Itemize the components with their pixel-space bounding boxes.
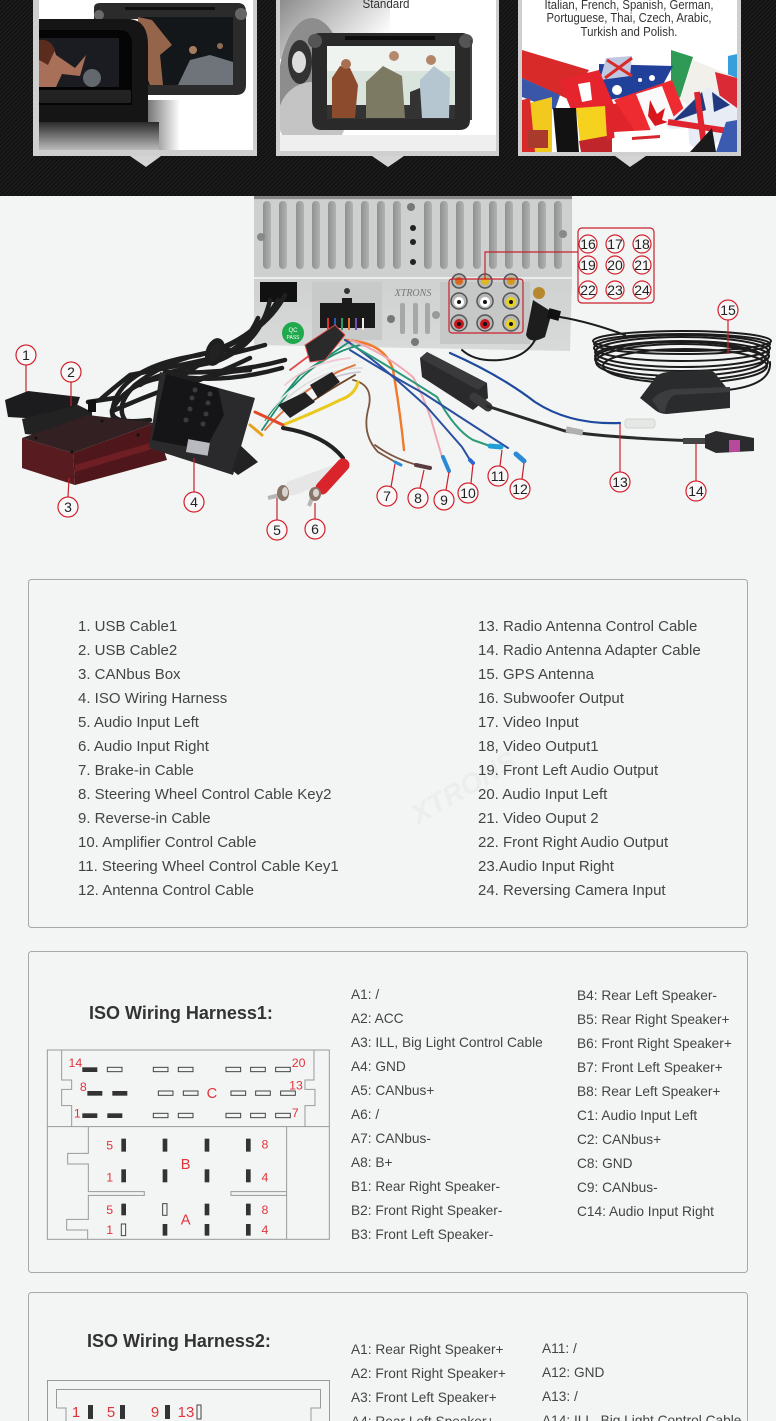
- USB plugs: [5, 391, 96, 435]
- wiring photo: [5, 196, 771, 540]
- panel: cable legend: [28, 580, 748, 928]
- pin list: column 1: A2: Front Right Speaker+: [351, 1366, 506, 1381]
- card: headrest monitors: [33, 0, 257, 167]
- connector diagram: 5: [107, 1404, 115, 1421]
- callout numbers: 19: [580, 257, 596, 273]
- pin list: column 2: A13: /: [542, 1389, 578, 1404]
- callout numbers: 20: [607, 257, 623, 273]
- dark feature band: [0, 0, 776, 196]
- callout numbers: [16, 235, 738, 540]
- pin list: column A: A4: GND: [351, 1059, 406, 1074]
- connector diagram: A: [181, 1212, 191, 1228]
- pin list: column B: C9: CANbus-: [577, 1180, 658, 1195]
- connector diagram: 8: [80, 1080, 87, 1094]
- callout numbers: 14: [688, 483, 704, 499]
- legend: left column: 10. Amplifier Control Cable: [78, 834, 256, 851]
- RCA audio plugs: [268, 465, 343, 506]
- watermark: XTRONS: [404, 745, 522, 831]
- pin list: column 1: [351, 1342, 506, 1421]
- pin list: column B: B7: Front Left Speaker+: [577, 1060, 723, 1075]
- legend: left column: 7. Brake-in Cable: [78, 762, 194, 779]
- legend: left column: 2. USB Cable2: [78, 642, 177, 659]
- callout numbers: 1: [22, 347, 30, 363]
- connector diagram: 5: [106, 1203, 113, 1217]
- legend: left column: 5. Audio Input Left: [78, 714, 200, 731]
- heat sink fins: [263, 201, 562, 269]
- callout numbers: 17: [607, 236, 623, 252]
- connector diagram: 4: [262, 1170, 269, 1184]
- connector diagram: 4: [262, 1223, 269, 1237]
- colored wire bundle: [250, 325, 508, 467]
- heading: ISO Wiring Harness2:: [87, 1331, 271, 1351]
- connector diagram: 1: [106, 1223, 113, 1237]
- callout numbers: 24: [634, 282, 650, 298]
- pin list: column B: B4: Rear Left Speaker-: [577, 988, 717, 1003]
- pin list: column A: [351, 987, 543, 1242]
- text: languages: [544, 0, 714, 39]
- connector diagram: 7: [292, 1106, 299, 1120]
- text: languages: Portuguese, Thai, Czech, Arabic,: [546, 10, 712, 25]
- pin list: column A: B1: Rear Right Speaker-: [351, 1179, 500, 1194]
- legend: left column: 3. CANbus Box: [78, 666, 181, 683]
- connector diagram: 1: [72, 1404, 80, 1421]
- legend: left column: [78, 618, 339, 899]
- panel: ISO wiring harness 1: [28, 952, 748, 1272]
- callout numbers: 18: [634, 236, 650, 252]
- pin list: column 2: A12: GND: [542, 1365, 604, 1380]
- pin list: column 1: A1: Rear Right Speaker+: [351, 1342, 504, 1357]
- legend: right column: 14. Radio Antenna Adapter Cable: [478, 642, 701, 659]
- legend: right column: 22. Front Right Audio Output: [478, 834, 669, 851]
- legend: left column: 4. ISO Wiring Harness: [78, 690, 227, 707]
- connector diagram: 8: [262, 1203, 269, 1217]
- legend: right column: 24. Reversing Camera Input: [478, 882, 666, 899]
- GPS puck: [640, 370, 730, 414]
- pin list: column B: B8: Rear Left Speaker+: [577, 1084, 720, 1099]
- callout numbers: 22: [580, 282, 596, 298]
- legend: left column: 12. Antenna Control Cable: [78, 882, 254, 899]
- callout numbers: 6: [311, 521, 319, 537]
- callout numbers: 16: [580, 236, 596, 252]
- pin list: column B: [577, 988, 732, 1219]
- pin list: column A: A3: ILL, Big Light Control Cable: [351, 1035, 543, 1050]
- legend: right column: 21. Video Ouput 2: [478, 810, 599, 827]
- connector diagram: 13: [178, 1404, 194, 1421]
- connector diagram: C: [207, 1086, 218, 1102]
- callout numbers: 12: [512, 481, 528, 497]
- gold antenna socket: [533, 287, 545, 299]
- RCA jacks: [451, 274, 519, 331]
- pin list: column A: A5: CANbus+: [351, 1083, 434, 1098]
- connector diagram: 9: [151, 1404, 159, 1421]
- panel: ISO wiring harness 2: [28, 1292, 748, 1421]
- callout numbers: 8: [414, 490, 422, 506]
- pin list: column 2: [542, 1341, 741, 1421]
- legend: right column: 23.Audio Input Right: [478, 858, 615, 875]
- pin list: column A: A1: /: [351, 987, 379, 1002]
- callout numbers: 15: [720, 302, 736, 318]
- legend: right column: 18, Video Output1: [478, 738, 599, 755]
- text: languages: Turkish and Polish.: [580, 24, 678, 39]
- connector diagram: [47, 1050, 329, 1239]
- wire terminals: [395, 446, 524, 471]
- legend: left column: 6. Audio Input Right: [78, 738, 210, 755]
- GPS antenna cable coil: [560, 317, 771, 391]
- legend: right column: 13. Radio Antenna Control Cable: [478, 618, 697, 635]
- pin list: column B: C1: Audio Input Left: [577, 1108, 697, 1123]
- pin list: column A: A7: CANbus-: [351, 1131, 431, 1146]
- icon: QC pass: QC: [288, 328, 298, 334]
- card: languages and flags: [518, 0, 741, 167]
- pin list: column A: A8: B+: [351, 1155, 392, 1170]
- callout numbers: 11: [491, 468, 505, 484]
- pin list: column 2: A11: /: [542, 1341, 577, 1356]
- connector diagram: B: [181, 1157, 191, 1173]
- pin list: column B: B6: Front Right Speaker+: [577, 1036, 732, 1051]
- connector bay: [312, 282, 382, 340]
- connector diagram: 1: [106, 1170, 113, 1184]
- callout numbers: 23: [607, 282, 623, 298]
- pin list: column A: A6: /: [351, 1107, 379, 1122]
- antenna adapter cable: [420, 352, 754, 453]
- pin list: column A: A2: ACC: [351, 1011, 404, 1026]
- pin list: column 1: A3: Front Left Speaker+: [351, 1390, 497, 1405]
- legend: left column: 9. Reverse-in Cable: [78, 810, 211, 827]
- callout numbers: 3: [64, 499, 72, 515]
- pin list: column B: B5: Rear Right Speaker+: [577, 1012, 730, 1027]
- heading: ISO Wiring Harness1:: [89, 1003, 273, 1023]
- callout numbers: 13: [612, 474, 628, 490]
- card: speaker and head unit: [276, 0, 499, 167]
- ISO connector: [149, 372, 258, 475]
- callout numbers: 7: [383, 488, 391, 504]
- legend: right column: 16. Subwoofer Output: [478, 690, 625, 707]
- icon: QC pass: PASS: [287, 335, 300, 341]
- GPS connector: [462, 300, 561, 360]
- legend: right column: 20. Audio Input Left: [478, 786, 608, 803]
- pin list: column A: B2: Front Right Speaker-: [351, 1203, 502, 1218]
- callout numbers: 9: [440, 492, 448, 508]
- legend: right column: 15. GPS Antenna: [478, 666, 595, 683]
- pin list: column B: C8: GND: [577, 1156, 633, 1171]
- connector diagram: 8: [262, 1138, 269, 1152]
- legend: left column: 11. Steering Wheel Control Cable Key1: [78, 858, 339, 875]
- connector diagram: 14: [68, 1056, 82, 1070]
- legend: right column: [478, 618, 701, 899]
- legend: right column: 17. Video Input: [478, 714, 579, 731]
- callout numbers: 21: [634, 257, 650, 273]
- XTRONS label: XTRONS: [394, 288, 431, 299]
- CANbus box: [22, 415, 167, 485]
- legend: left column: 8. Steering Wheel Control Cable Key2: [78, 786, 331, 803]
- callout numbers: 4: [190, 494, 198, 510]
- icon: QC pass: [282, 322, 304, 344]
- connector diagram: 1: [74, 1106, 81, 1120]
- connector diagram: 20: [292, 1056, 306, 1070]
- callout numbers: 5: [273, 522, 281, 538]
- connector diagram: [48, 1380, 330, 1421]
- head unit rear chassis: [254, 196, 572, 351]
- black socket: [260, 282, 297, 302]
- pin list: column B: C2: CANbus+: [577, 1132, 661, 1147]
- connector diagram: 13: [289, 1079, 303, 1093]
- callout numbers: 2: [67, 364, 75, 380]
- black cable bundle: [88, 295, 285, 425]
- pin list: column A: B3: Front Left Speaker-: [351, 1227, 493, 1242]
- callout numbers: 10: [460, 485, 476, 501]
- callout lines: [26, 228, 728, 520]
- legend: right column: 19. Front Left Audio Output: [478, 762, 659, 779]
- pin list: column B: C14: Audio Input Right: [577, 1204, 714, 1219]
- legend: left column: 1. USB Cable1: [78, 618, 177, 635]
- connector diagram: 5: [106, 1138, 113, 1152]
